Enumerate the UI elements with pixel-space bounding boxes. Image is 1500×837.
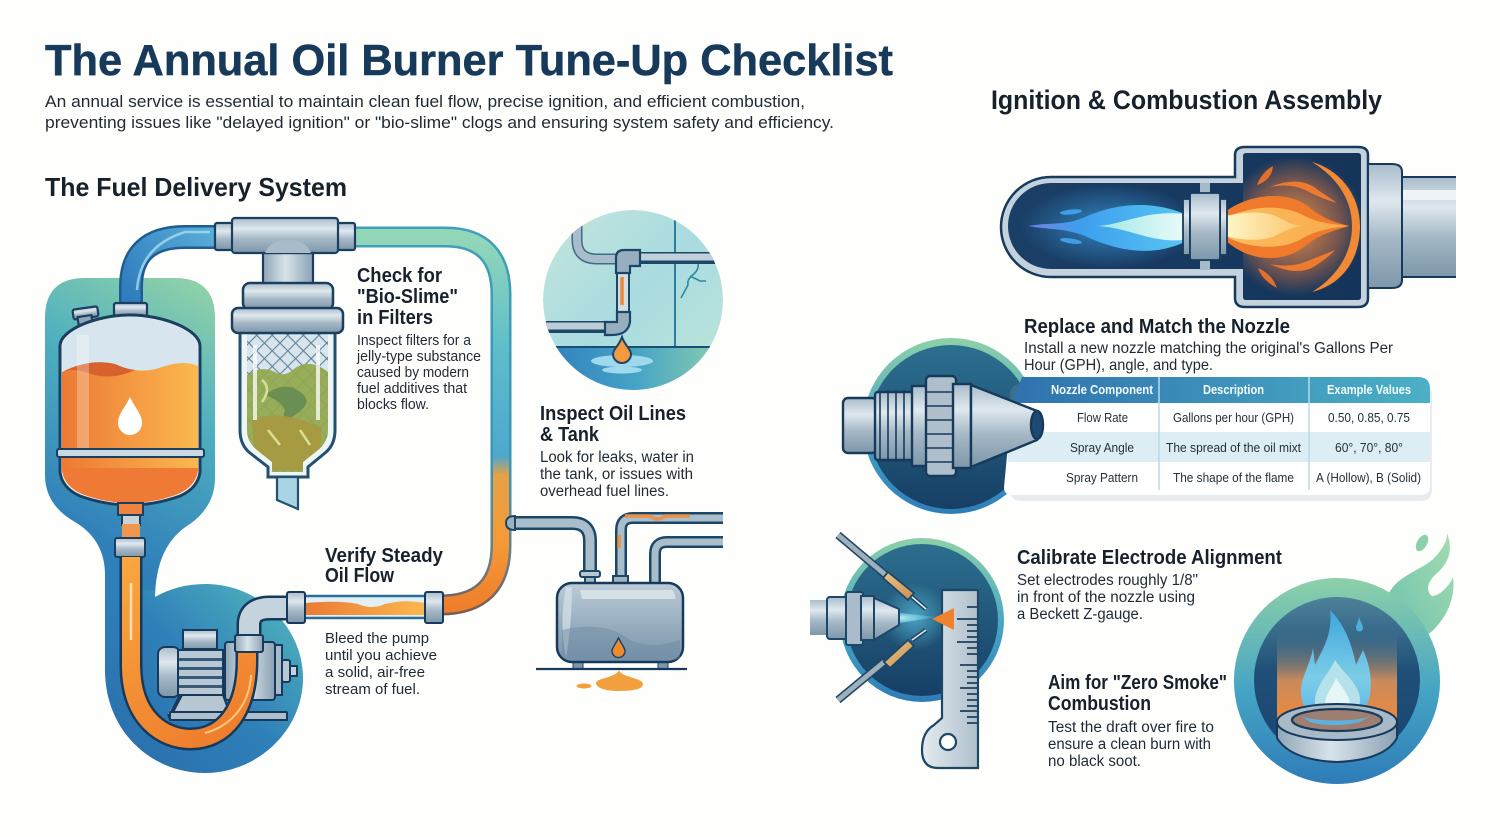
panel: electrode alignment <box>810 535 1282 768</box>
callout: nozzle heading: Replace and Match the Nozzle <box>1024 315 1290 338</box>
filter head <box>232 283 343 333</box>
filter mesh <box>247 333 328 473</box>
panel: fuel delivery diagram <box>45 210 730 773</box>
blue flame icon <box>1301 610 1371 723</box>
main pipe: filter to pump line <box>350 237 501 605</box>
background blob <box>45 278 303 773</box>
orange supply stub and coupling <box>115 503 145 557</box>
blue flame <box>1028 205 1185 251</box>
callout: bio-slime: caused by modern <box>357 365 469 381</box>
header row: Example Values <box>1327 382 1411 397</box>
oil drop <box>118 397 142 435</box>
header row <box>1051 382 1411 397</box>
intro text: preventing issues like "delayed ignition" or "bio-slime" clogs and ensuring system safety and efficiency. <box>45 113 834 132</box>
right collar and pipe <box>1368 164 1456 288</box>
callout: oil flow: until you achieve <box>325 648 437 664</box>
callout: zero smoke: Test the draft over fire to <box>1048 719 1214 736</box>
base line <box>536 668 687 670</box>
table rows: 60°, 70°, 80° <box>1335 440 1403 455</box>
callout: nozzle heading: Hour (GPH), angle, and type. <box>1024 357 1213 374</box>
callout: oil flow: a solid, air-free <box>325 665 425 681</box>
filter bowl <box>240 330 335 477</box>
callout: bio-slime: Check for <box>357 265 442 287</box>
callout: electrode: a Beckett Z-gauge. <box>1017 606 1143 623</box>
header row: Description <box>1203 382 1264 397</box>
supply pipe: tank to filter <box>131 232 220 306</box>
blue glow <box>1020 184 1200 268</box>
callout: zero smoke: ensure a clean burn with <box>1048 736 1211 753</box>
table shadow <box>1010 384 1432 501</box>
gauge <box>922 590 978 768</box>
table rows: The shape of the flame <box>1173 470 1294 485</box>
orange flame <box>1225 196 1349 258</box>
callout: nozzle heading <box>1024 315 1394 374</box>
callout: oil flow: stream of fuel. <box>325 682 420 698</box>
callout: bio-slime: jelly-type substance <box>356 349 481 365</box>
tank drop <box>612 638 625 658</box>
burner tube outline <box>1001 147 1368 307</box>
callout: zero smoke: Aim for "Zero Smoke" <box>1048 672 1227 694</box>
bio-slime <box>247 364 328 475</box>
spray cone <box>881 583 949 651</box>
callout: electrode: Calibrate Electrode Alignment <box>1017 546 1282 569</box>
combustion glow and arcs <box>1243 158 1361 294</box>
table rows: Spray Angle <box>1070 440 1134 455</box>
drain tip <box>277 477 298 509</box>
callout: zero smoke: no black soot. <box>1048 753 1141 770</box>
pump elbow <box>235 608 290 652</box>
oil puddle <box>576 670 643 691</box>
upper electrode <box>838 535 926 609</box>
combustion chamber interior <box>1008 153 1361 300</box>
callout: bio-slime: Inspect filters for a <box>357 333 472 349</box>
nozzle table <box>1004 377 1430 495</box>
table rows: Spray Pattern <box>1066 470 1138 485</box>
burner ring <box>1277 704 1397 762</box>
table rows <box>1066 410 1421 485</box>
flame disc <box>1234 578 1440 784</box>
tank legs <box>573 662 668 669</box>
callout: oil flow: Verify Steady <box>325 545 444 567</box>
oil level <box>60 312 200 505</box>
callout: oil flow: Oil Flow <box>325 565 394 587</box>
tank body <box>60 315 200 505</box>
alignment pointer <box>932 608 954 630</box>
small nozzle <box>810 592 899 645</box>
heading: ignition and combustion assembly: Ignition & Combustion Assembly <box>991 85 1382 115</box>
heading: fuel delivery system: The Fuel Delivery System <box>45 172 347 202</box>
callout: oil flow: Bleed the pump <box>325 631 429 647</box>
electrode disc <box>840 538 1004 702</box>
callout: nozzle heading: Install a new nozzle matching the original's Gallons Per <box>1024 340 1394 357</box>
table rows: Flow Rate <box>1077 410 1128 425</box>
intro text <box>45 92 834 132</box>
center fitting <box>1183 183 1227 270</box>
callout: bio-slime: fuel additives that <box>357 381 467 397</box>
nozzle disc <box>863 338 1039 514</box>
pump motor <box>158 630 297 720</box>
callout: oil lines and tank: & Tank <box>540 423 600 446</box>
tank pipes <box>512 516 723 585</box>
title: The Annual Oil Burner Tune-Up Checklist <box>45 36 893 85</box>
callout: electrode: Set electrodes roughly 1/8" <box>1017 572 1198 589</box>
callout: electrode <box>1017 546 1282 623</box>
callout: bio-slime: "Bio-Slime" <box>357 286 458 308</box>
callout: oil lines and tank: Look for leaks, water in <box>540 449 694 466</box>
header row: Nozzle Component <box>1051 382 1154 397</box>
panel: burner assembly <box>1001 147 1456 307</box>
oil tank <box>57 303 204 505</box>
U-shaped oil pipe <box>131 557 251 739</box>
callout: electrode: in front of the nozzle using <box>1017 589 1195 606</box>
table rows: A (Hollow), B (Solid) <box>1316 470 1421 485</box>
table rows: 0.50, 0.85, 0.75 <box>1328 410 1410 425</box>
panel: nozzle and table <box>843 315 1432 514</box>
intro text: An annual service is essential to maintain clean fuel flow, precise ignition, and efficient combustion, <box>45 92 805 111</box>
panel: zero smoke combustion <box>1048 533 1453 784</box>
tank body <box>557 583 683 662</box>
fuel filter <box>232 283 343 509</box>
callout: oil flow <box>325 545 444 698</box>
callout: oil lines and tank: the tank, or issues with <box>540 466 693 483</box>
callout: zero smoke <box>1048 672 1227 770</box>
callout: zero smoke: Combustion <box>1048 693 1151 715</box>
callout: oil lines and tank: overhead fuel lines. <box>540 483 669 500</box>
icon: leaking pipe circle <box>540 210 730 392</box>
T fitting <box>215 218 355 285</box>
callout: bio-slime: blocks flow. <box>357 397 429 413</box>
tank cap and neck <box>72 303 147 325</box>
lower electrode <box>838 630 926 700</box>
sight glass line <box>287 592 443 623</box>
table rows: Gallons per hour (GPH) <box>1173 410 1294 425</box>
tank band <box>57 449 204 457</box>
callout: bio-slime <box>356 265 481 413</box>
callout: oil lines and tank <box>540 402 694 500</box>
callout: bio-slime: in Filters <box>357 307 433 329</box>
table rows: The spread of the oil mixt <box>1166 440 1301 455</box>
callout: oil lines and tank: Inspect Oil Lines <box>540 402 686 425</box>
smoke wisp <box>1388 533 1453 640</box>
storage tank and pipes <box>506 516 723 691</box>
icon: nozzle <box>843 376 1043 476</box>
